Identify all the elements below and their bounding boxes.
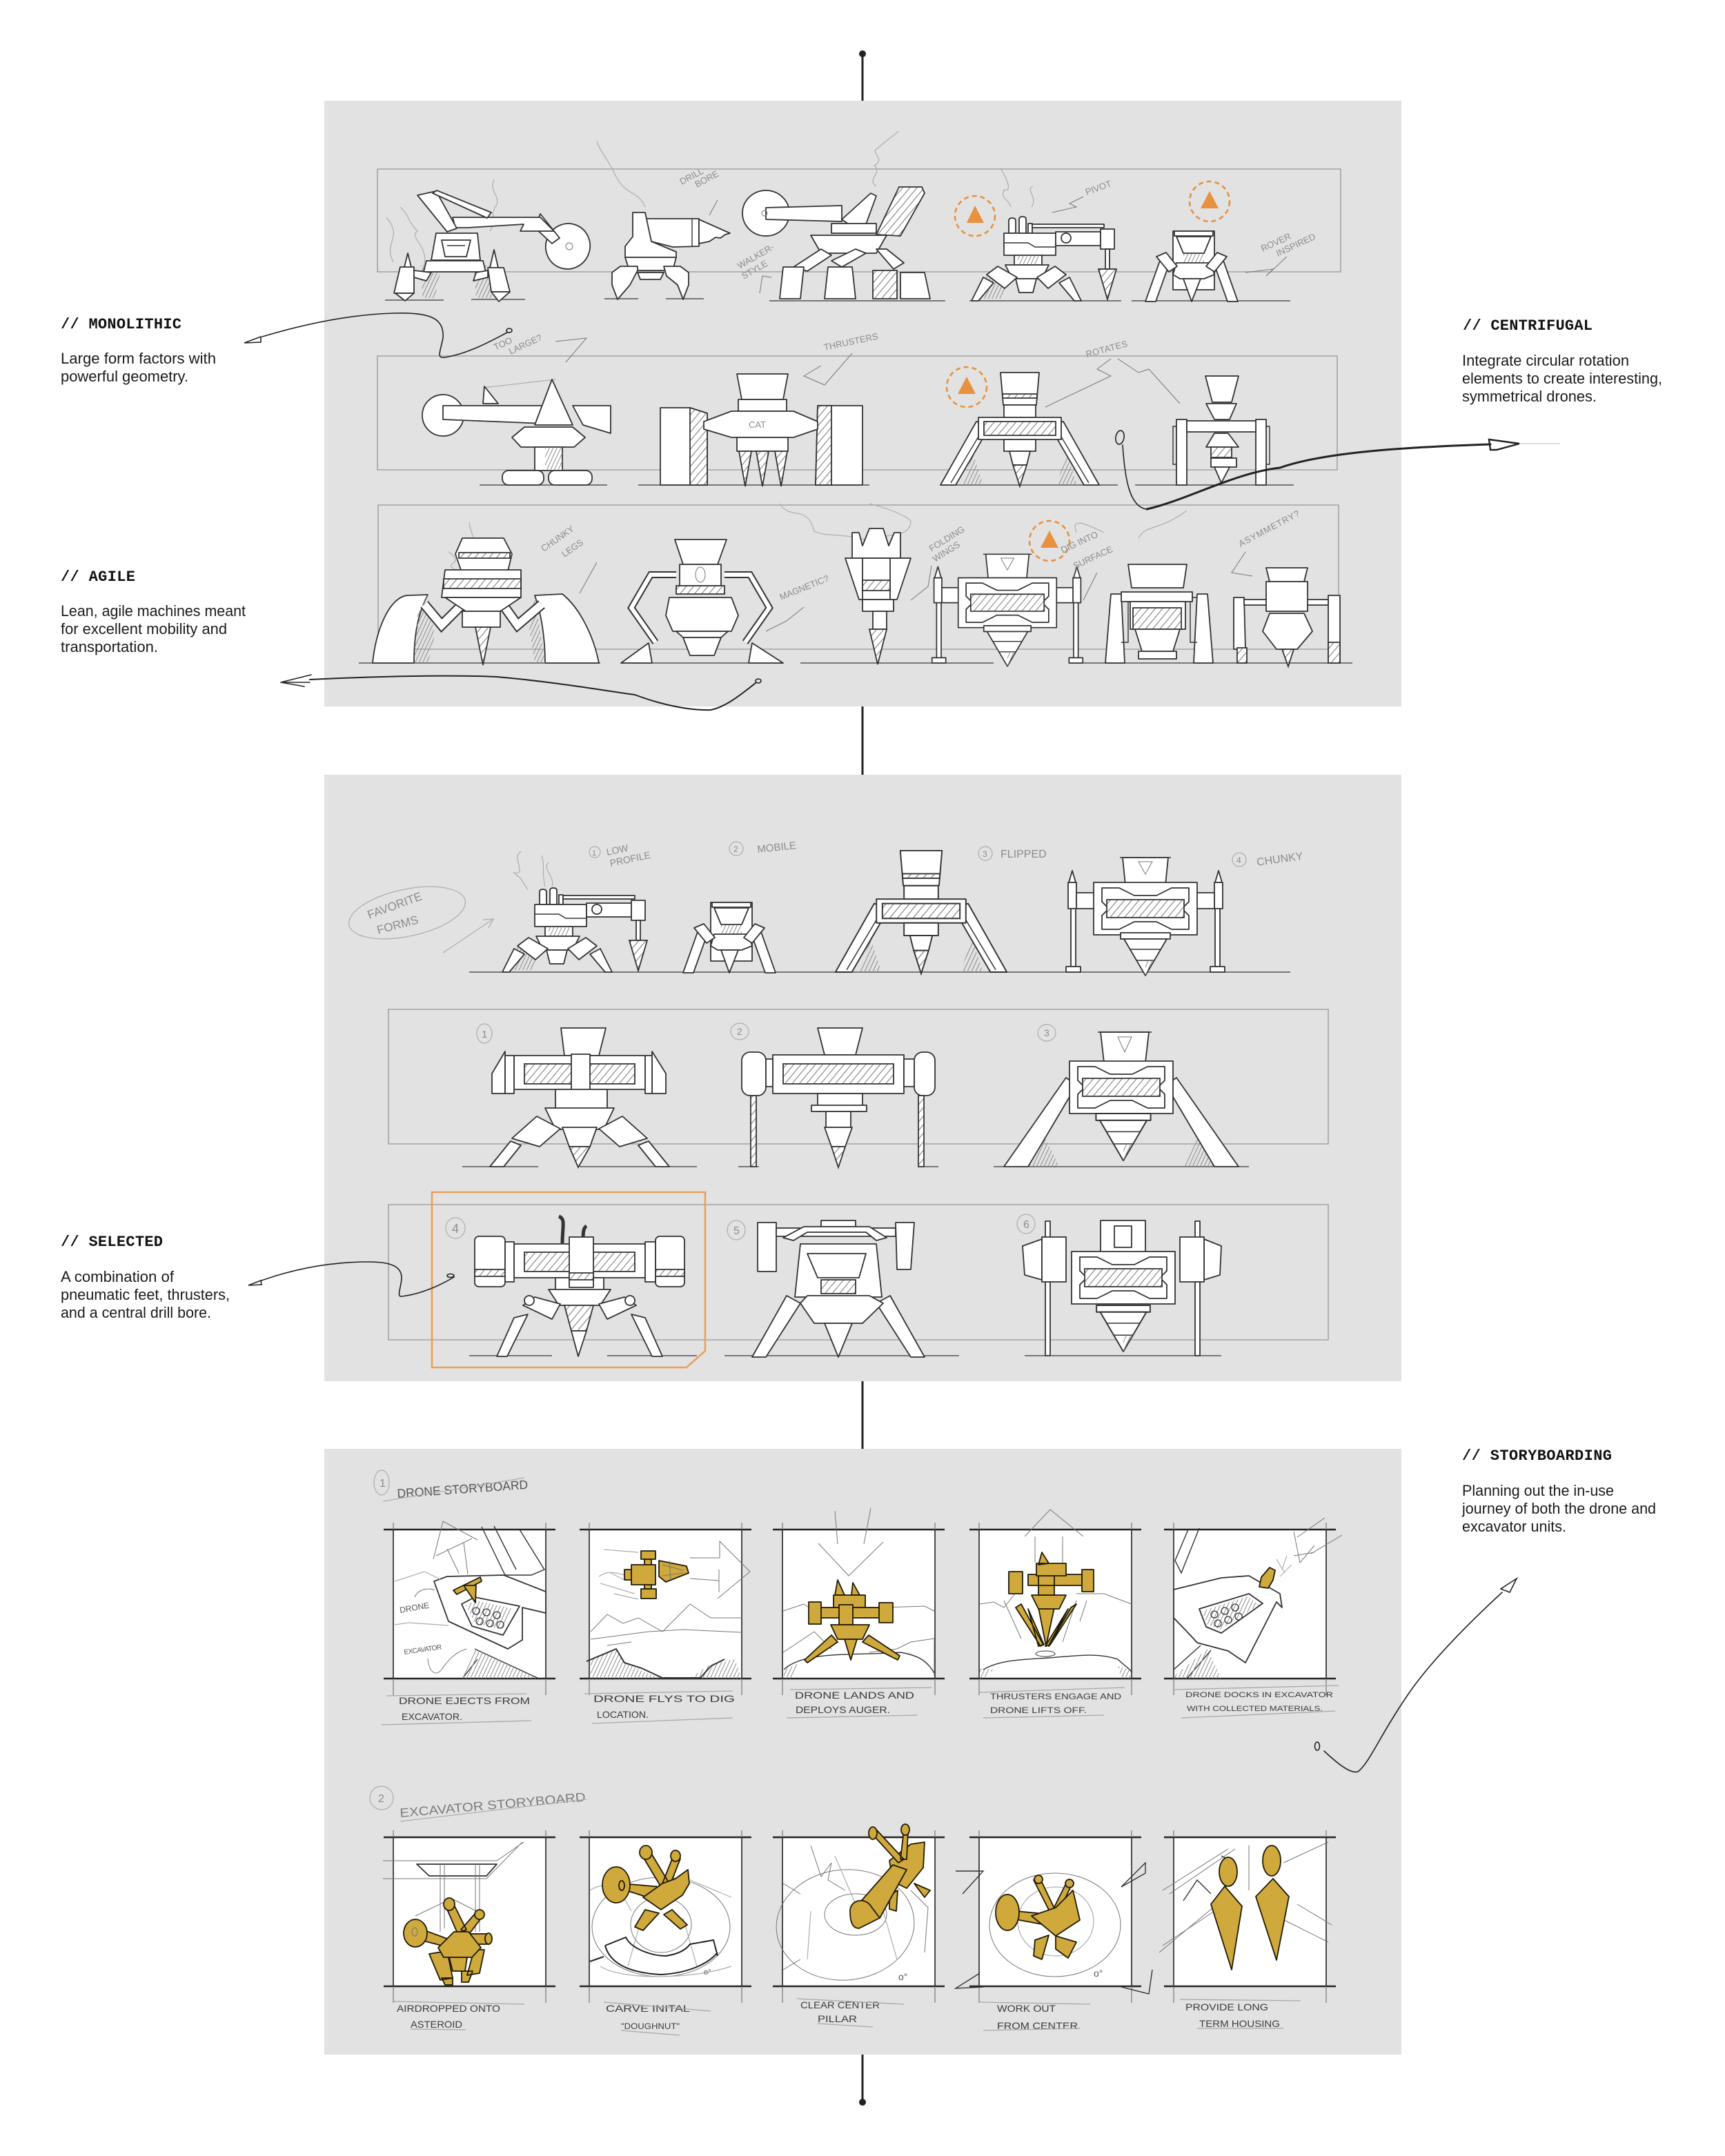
excavator storyboard captions: PILLAR bbox=[818, 2013, 857, 2024]
storyboard: carve doughnut bbox=[580, 1830, 751, 2003]
favourite forms note bbox=[344, 840, 1304, 953]
excavator storyboard captions: ASTEROID bbox=[411, 2019, 462, 2030]
heading: excavator storyboard: EXCAVATOR STORYBOARD bbox=[400, 1790, 586, 1820]
storyboard: clear center pillar bbox=[771, 1824, 945, 2003]
drone sketch row one bbox=[385, 187, 1290, 301]
callout: selected: pneumatic feet, thrusters, bbox=[61, 1286, 230, 1303]
callout: agile: // AGILE bbox=[61, 568, 135, 586]
sketch annotations: DRILL bbox=[678, 166, 705, 187]
excavator storyboard captions: PROVIDE LONG bbox=[1185, 2001, 1268, 2012]
orange marker: row three bbox=[1029, 521, 1070, 561]
arrow: storyboarding bbox=[1315, 1579, 1517, 1772]
drone: asymmetric legs bbox=[1234, 568, 1340, 666]
orange marker: row one right bbox=[1190, 181, 1230, 221]
sketch annotations: INSPIRED bbox=[1274, 231, 1317, 259]
drone: rover mobile bbox=[1145, 231, 1238, 301]
favourite forms note: 2 bbox=[733, 844, 738, 854]
callout: centrifugal bbox=[1462, 317, 1662, 405]
favourite forms row bbox=[502, 851, 1225, 976]
favourite forms note: CHUNKY bbox=[1256, 851, 1304, 869]
callout: selected bbox=[61, 1234, 230, 1321]
concept numbers: 5 bbox=[733, 1225, 740, 1237]
callout: monolithic: powerful geometry. bbox=[61, 368, 188, 385]
heading: drone storyboard bbox=[374, 1470, 529, 1501]
drone storyboard captions: DRONE LANDS AND bbox=[795, 1690, 914, 1701]
storyboard: long term housing bbox=[1159, 1830, 1336, 2003]
drone: mobile favourite bbox=[683, 902, 776, 973]
sketch annotations bbox=[492, 166, 1317, 631]
excavator storyboard captions: FROM CENTER bbox=[997, 2020, 1078, 2031]
favourite forms note: 3 bbox=[983, 849, 987, 859]
sketch annotations: PIVOT bbox=[1084, 178, 1113, 197]
heading: excavator storyboard: 2 bbox=[378, 1793, 384, 1805]
selection highlight box bbox=[432, 1192, 705, 1367]
storyboard: drone ejects: EXCAVATOR bbox=[404, 1643, 442, 1656]
callout: agile: Lean, agile machines meant bbox=[61, 602, 246, 620]
orange marker: row one left bbox=[955, 196, 995, 236]
excavator storyboard captions bbox=[393, 1999, 1301, 2035]
storyboard: airdropped bbox=[383, 1830, 555, 2003]
drone: stacked frame bbox=[1105, 564, 1213, 663]
favourite forms note: FLIPPED bbox=[1000, 849, 1047, 860]
drone: side drill bbox=[612, 212, 730, 299]
drone: thrusters: CAT bbox=[749, 419, 766, 430]
drone: low profile pivot bbox=[972, 217, 1116, 301]
drone storyboard captions: THRUSTERS ENGAGE AND bbox=[990, 1692, 1121, 1701]
drone: excavator with saw bbox=[394, 190, 596, 301]
concept numbers: 1 bbox=[482, 1029, 487, 1040]
panel: storyboards bbox=[324, 1449, 1401, 2055]
drone: thrusters bbox=[660, 374, 862, 486]
callout: monolithic: Large form factors with bbox=[61, 350, 216, 367]
drone: magnetic arms bbox=[621, 540, 783, 663]
concept numbers: 6 bbox=[1023, 1219, 1029, 1231]
drone: chunky favourite bbox=[1066, 858, 1225, 976]
callout: storyboarding: // STORYBOARDING bbox=[1462, 1447, 1612, 1465]
sketch annotations: FOLDING bbox=[927, 524, 967, 554]
sketch annotations: TOO bbox=[492, 335, 514, 353]
drone: rotating columns bbox=[1173, 376, 1270, 485]
sketch annotations: LEGS bbox=[560, 537, 585, 559]
storyboard: thrusters engage bbox=[969, 1510, 1141, 1695]
favourite forms note: FORMS bbox=[375, 913, 420, 937]
callout: centrifugal: elements to create interesting, bbox=[1462, 370, 1662, 387]
callout: agile: transportation. bbox=[61, 638, 158, 655]
sketch annotations: MAGNETIC? bbox=[778, 573, 830, 602]
storyboard: drone flies bbox=[580, 1523, 751, 1695]
concept 3 bbox=[1004, 1032, 1239, 1167]
callout: storyboarding: journey of both the drone and bbox=[1461, 1500, 1656, 1517]
refinement row one bbox=[490, 1028, 1239, 1167]
callout: storyboarding: excavator units. bbox=[1462, 1518, 1566, 1535]
concept 1 bbox=[490, 1028, 669, 1167]
storyboard: carve doughnut: o° bbox=[704, 1968, 711, 1977]
storyboard: drone docks bbox=[1164, 1518, 1342, 1695]
arrow: selected bbox=[248, 1262, 454, 1296]
panel: selected form refinement bbox=[324, 775, 1401, 1381]
sketch annotations: ROTATES bbox=[1085, 338, 1129, 359]
favourite forms note: 4 bbox=[1236, 856, 1241, 865]
sketch annotations: LARGE? bbox=[507, 332, 544, 357]
excavator storyboard captions: AIRDROPPED ONTO bbox=[397, 2003, 500, 2014]
drone: pneumatic chunky bbox=[932, 554, 1083, 666]
sketch annotations: THRUSTERS bbox=[823, 331, 879, 353]
drone: low profile favourite bbox=[502, 888, 647, 972]
sketch annotations: BORE bbox=[693, 168, 720, 190]
callout: monolithic: // MONOLITHIC bbox=[61, 316, 181, 333]
callout: agile bbox=[61, 568, 246, 655]
storyboard: work out from center bbox=[956, 1830, 1152, 2003]
concept numbers: 3 bbox=[1044, 1027, 1049, 1038]
drone storyboard captions bbox=[382, 1685, 1339, 1725]
concept numbers: 4 bbox=[452, 1222, 459, 1236]
drone storyboard captions: DEPLOYS AUGER. bbox=[796, 1704, 890, 1715]
drone sketch row three bbox=[359, 528, 1352, 666]
drone storyboard captions: WITH COLLECTED MATERIALS. bbox=[1187, 1705, 1323, 1713]
refinement row two bbox=[475, 1216, 1221, 1357]
sketch annotations: WINGS bbox=[931, 539, 962, 564]
drone: folding wings bbox=[845, 528, 911, 664]
callout: centrifugal: // CENTRIFUGAL bbox=[1463, 317, 1593, 335]
favourite forms note: LOW bbox=[605, 842, 630, 858]
drone sketch row two bbox=[422, 373, 1294, 486]
concept 4 selected bbox=[475, 1216, 684, 1356]
callout: centrifugal: Integrate circular rotation bbox=[1462, 352, 1629, 369]
callout: centrifugal: symmetrical drones. bbox=[1462, 388, 1597, 405]
storyboard: clear center pillar: o° bbox=[898, 1971, 907, 1982]
sketch annotations: DIG INTO bbox=[1059, 529, 1099, 555]
excavator storyboard captions: "DOUGHNUT" bbox=[621, 2021, 680, 2031]
heading: excavator storyboard bbox=[370, 1786, 586, 1821]
drone storyboard captions: DRONE LIFTS OFF. bbox=[990, 1705, 1087, 1715]
favourite forms note: PROFILE bbox=[609, 849, 651, 869]
orange marker: row two bbox=[947, 367, 987, 407]
sketch annotations: ROVER bbox=[1259, 231, 1292, 254]
excavator storyboard captions: CARVE INITAL bbox=[606, 2003, 690, 2014]
callout: selected: and a central drill bore. bbox=[61, 1304, 211, 1321]
storyboard: drone lands bbox=[773, 1508, 945, 1695]
panel: form exploration sketches bbox=[324, 101, 1401, 706]
storyboard: work out from center: o° bbox=[1094, 1968, 1103, 1979]
sketch annotations: WALKER- bbox=[736, 241, 776, 271]
excavator storyboard captions: WORK OUT bbox=[997, 2003, 1056, 2014]
excavator storyboard captions: CLEAR CENTER bbox=[800, 1999, 880, 2010]
arrow: centrifugal bbox=[1114, 430, 1560, 509]
heading: drone storyboard: DRONE STORYBOARD bbox=[397, 1478, 529, 1501]
favourite forms note: FAVORITE bbox=[366, 890, 424, 922]
callout: storyboarding: Planning out the in-use bbox=[1462, 1482, 1614, 1499]
drone storyboard captions: DRONE FLYS TO DIG bbox=[593, 1693, 735, 1704]
drone storyboard captions: LOCATION. bbox=[597, 1709, 649, 1720]
concept 6 bbox=[1023, 1220, 1221, 1356]
callout: selected: // SELECTED bbox=[61, 1234, 163, 1251]
callout: monolithic bbox=[61, 316, 216, 385]
excavator storyboard captions: TERM HOUSING bbox=[1199, 2018, 1280, 2029]
arrow: monolithic bbox=[244, 313, 512, 357]
drone: chunky legs bbox=[373, 538, 599, 665]
favourite forms note: 1 bbox=[592, 849, 596, 858]
drone: flipped favourite bbox=[836, 851, 1007, 973]
sketch annotations: STYLE bbox=[740, 258, 769, 281]
favourite forms note: MOBILE bbox=[757, 840, 797, 856]
concept numbers: 2 bbox=[737, 1026, 742, 1037]
sketch annotations: CHUNKY bbox=[539, 523, 576, 553]
heading: drone storyboard: 1 bbox=[379, 1478, 386, 1490]
drone: flipped tripod bbox=[940, 373, 1099, 486]
arrow: agile bbox=[281, 675, 761, 710]
callout: selected: A combination of bbox=[61, 1268, 175, 1285]
callout: agile: for excellent mobility and bbox=[61, 620, 227, 637]
drone storyboard captions: DRONE EJECTS FROM bbox=[399, 1695, 530, 1706]
sketch annotations: SURFACE bbox=[1072, 544, 1114, 571]
drone: tracked saw bbox=[422, 379, 611, 485]
drone storyboard captions: DRONE DOCKS IN EXCAVATOR bbox=[1185, 1691, 1333, 1699]
drone: walker with disc bbox=[742, 187, 930, 299]
concept 5 bbox=[752, 1220, 925, 1357]
concept numbers bbox=[446, 1023, 1056, 1240]
timeline connector bbox=[859, 50, 866, 2106]
storyboard: drone ejects: DRONE bbox=[399, 1601, 430, 1615]
storyboard: drone ejects bbox=[384, 1521, 555, 1695]
drone storyboard captions: EXCAVATOR. bbox=[402, 1711, 462, 1722]
concept 2 bbox=[742, 1028, 935, 1167]
sketch annotations: ASYMMETRY? bbox=[1236, 508, 1301, 549]
callout: storyboarding bbox=[1461, 1447, 1656, 1535]
